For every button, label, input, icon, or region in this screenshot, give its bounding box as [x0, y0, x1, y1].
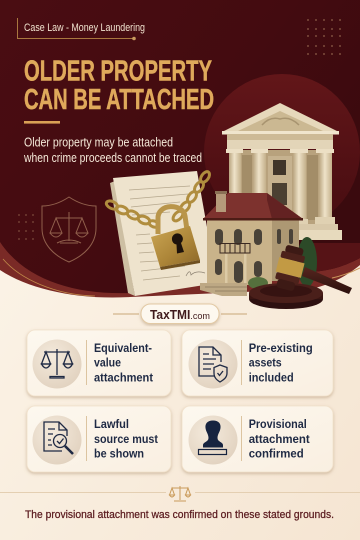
subtitle: Older property may be attached [24, 134, 173, 150]
card: Equivalent-value attachment [27, 330, 171, 396]
card text [249, 417, 310, 460]
card: Lawful source must be shown [27, 406, 171, 472]
card text: attachment [94, 370, 153, 384]
faint dot grid left [18, 214, 34, 240]
maroon hero background with curved edge [0, 0, 360, 298]
icon: rubber stamp [198, 420, 226, 454]
subtitle [23, 134, 202, 165]
card: Provisional attachment confirmed [182, 406, 333, 472]
card text: included [249, 370, 294, 384]
title [24, 56, 214, 116]
eyebrow label: Case Law - Money Laundering: Case Law - Money Laundering [24, 22, 145, 34]
title: OLDER PROPERTY [24, 56, 212, 88]
card text: Provisional [249, 417, 307, 431]
courthouse illustration [222, 103, 342, 240]
footer statement: The provisional attachment was confirmed on these stated grounds. [25, 509, 334, 521]
card text: confirmed [249, 446, 304, 460]
card text: Pre-existing [249, 341, 313, 355]
card text: value [94, 356, 121, 370]
card text [94, 341, 153, 384]
miniature house [200, 191, 303, 296]
card text [249, 341, 313, 384]
TaxTMI brand pill [113, 304, 247, 324]
decorative dots top right [307, 19, 341, 55]
card text [94, 417, 158, 460]
eyebrow label: Case Law - Money Laundering [18, 18, 145, 40]
card text: be shown [94, 446, 144, 460]
gold chain [105, 170, 211, 229]
lighter maroon floor behind gavel [310, 243, 360, 272]
card: Pre-existing assets included [182, 330, 333, 396]
card text: Lawful [94, 417, 129, 431]
card text: source must [94, 432, 158, 446]
subtitle: when crime proceeds cannot be traced [23, 150, 202, 165]
card text: assets [249, 356, 282, 370]
document with signature [110, 171, 217, 296]
gavel on sound block [249, 237, 352, 309]
title: CAN BE ATTACHED [24, 84, 214, 116]
title underline [24, 121, 60, 124]
footer divider with scales icon [0, 486, 360, 501]
padlock [151, 207, 200, 270]
card text: Equivalent- [94, 341, 152, 355]
card text: attachment [249, 432, 310, 446]
icon: document with shield [199, 347, 227, 382]
icon: document with magnifier [44, 422, 73, 454]
TaxTMI brand pill: TaxTMI.com [150, 308, 210, 322]
icon: balance scales [42, 349, 72, 378]
faint shield with scales emblem [42, 197, 96, 262]
decorative circle behind courthouse [204, 74, 360, 230]
